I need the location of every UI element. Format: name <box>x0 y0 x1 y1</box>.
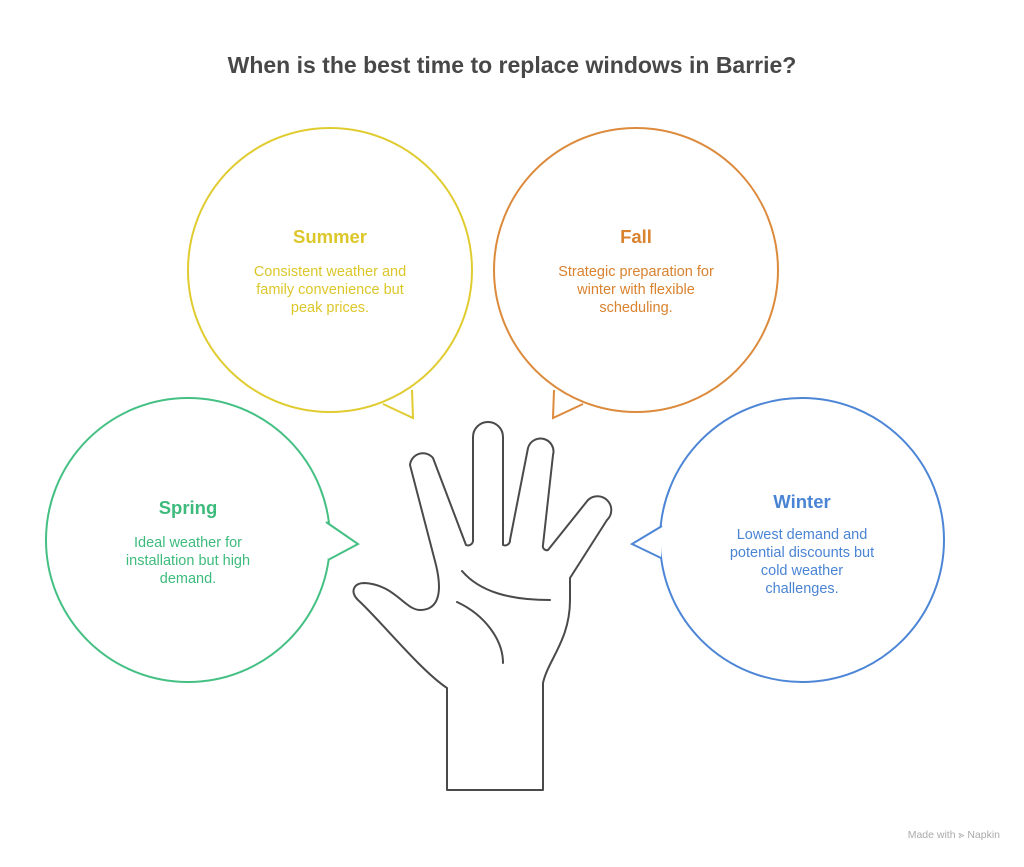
bubble: summer: peak prices. <box>291 300 369 316</box>
bubble: spring: Spring <box>159 497 217 518</box>
bubble: spring: Ideal weather for <box>134 535 242 551</box>
bubble: fall: Strategic preparation for <box>558 264 714 280</box>
bubble: winter: cold weather <box>761 563 843 579</box>
bubble: winter <box>632 398 944 682</box>
bubble: summer <box>188 128 472 418</box>
bubble: fall <box>494 128 778 418</box>
bubble: spring <box>46 398 358 682</box>
bubble: fall: Fall <box>620 226 652 247</box>
bubble: spring: installation but high <box>126 553 250 569</box>
bubble: winter: Winter <box>773 491 831 512</box>
footer: made with napkin: Made with ⪢ Napkin <box>908 829 1000 841</box>
icon: hand <box>354 422 611 790</box>
title: When is the best time to replace windows in Barrie? <box>228 52 796 78</box>
bubble: fall: winter with flexible <box>576 282 695 298</box>
bubble: winter: Lowest demand and <box>737 527 867 543</box>
bubble: fall: scheduling. <box>599 300 673 316</box>
bubble: winter: potential discounts but <box>730 545 874 561</box>
bubble: summer: Summer <box>293 226 367 247</box>
bubble: winter: challenges. <box>765 581 839 597</box>
bubble: spring: demand. <box>160 571 216 587</box>
bubble: summer: Consistent weather and <box>254 264 406 280</box>
bubble: summer: family convenience but <box>256 282 404 298</box>
